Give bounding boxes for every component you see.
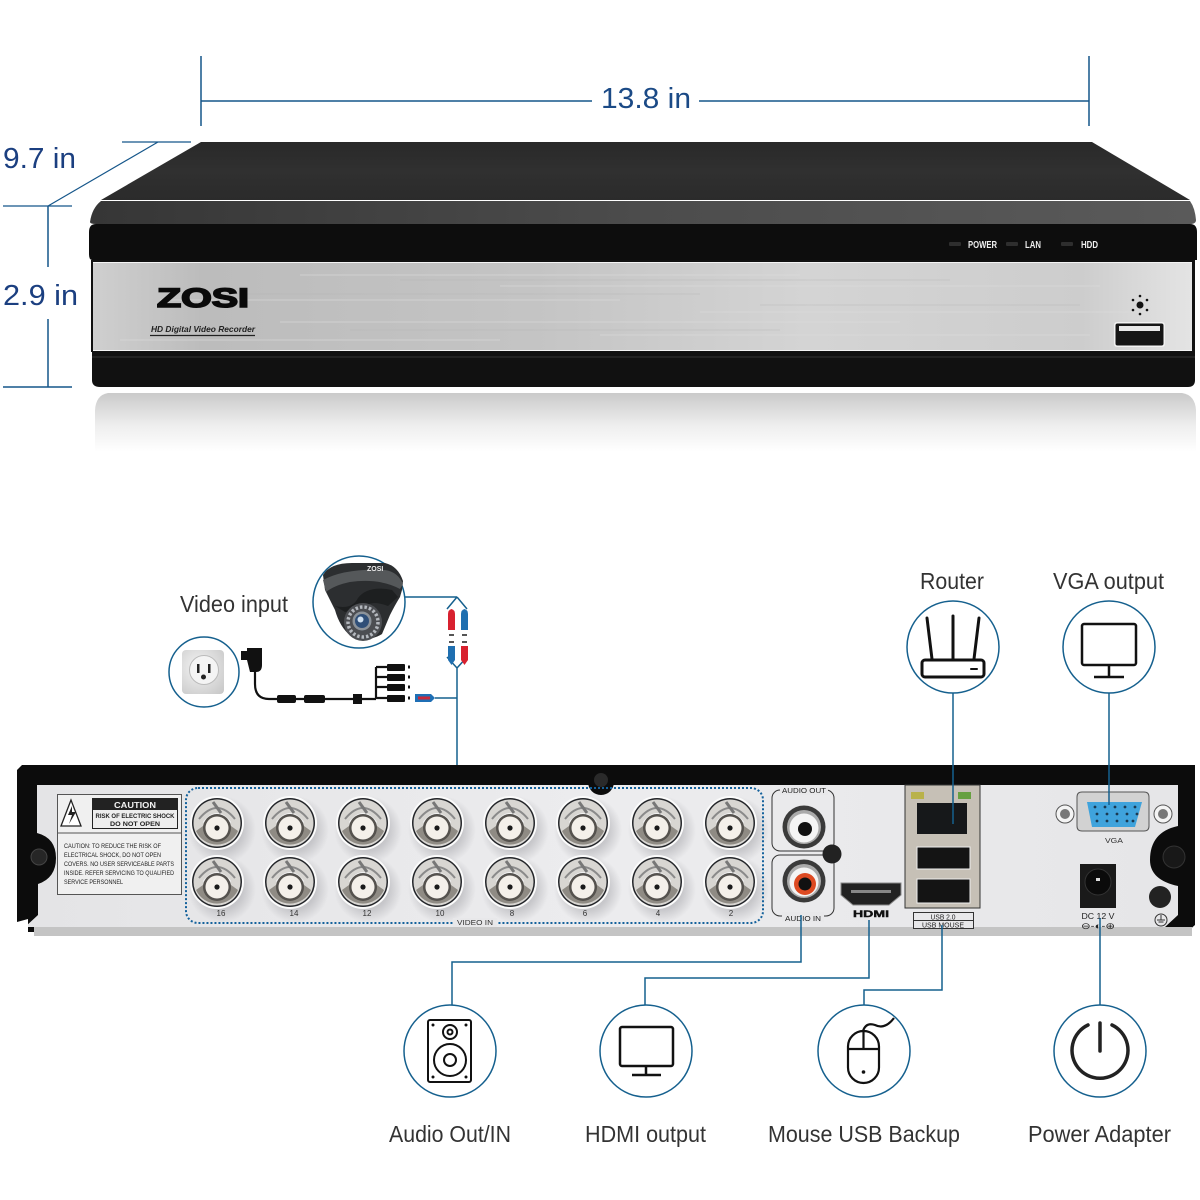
- audio out/in ports: [772, 785, 842, 923]
- callout: VGA output: [1053, 568, 1165, 693]
- front view DVR: [89, 142, 1197, 452]
- rear silver panel: [25, 785, 1178, 927]
- dimension: height 2.9 in: [3, 206, 78, 387]
- callout: Router: Router: [920, 568, 984, 594]
- HDMI port: [841, 883, 901, 920]
- icon: router: [922, 616, 984, 677]
- LED indicators: POWER: [968, 240, 998, 251]
- LED indicators: LAN: [1025, 240, 1041, 251]
- ZOSI logo: [150, 283, 256, 336]
- BNC channel numbers: 10: [436, 909, 445, 918]
- USB 2.0 label: USB MOUSE: [922, 922, 964, 930]
- audio out/in ports: AUDIO IN: [785, 914, 821, 923]
- caution label: INSIDE. REFER SERVICING TO QUALIFIED: [64, 871, 175, 877]
- BNC channel numbers: 16: [217, 909, 226, 918]
- BNC channel numbers: 8: [510, 909, 515, 918]
- BNC channel numbers: 2: [729, 909, 734, 918]
- callout: Audio Out/IN: [389, 1005, 511, 1147]
- icon: speaker: [428, 1020, 471, 1082]
- icon: monitor: [1082, 624, 1136, 677]
- BNC channel numbers: [217, 909, 734, 918]
- dimension: depth 9.7 in: 9.7 in: [3, 143, 76, 175]
- icon: wall outlet: [169, 637, 239, 707]
- bottom black base: [92, 351, 1195, 387]
- DC 12V jack: [1080, 864, 1116, 931]
- callout: Power Adapter: [1028, 1005, 1171, 1147]
- connector lines: [452, 693, 1109, 1005]
- top face: [101, 142, 1190, 200]
- black front band: [89, 224, 1197, 260]
- rear view DVR: [17, 765, 1195, 936]
- BNC channel numbers: 6: [583, 909, 588, 918]
- ZOSI logo: ZOSI: [157, 283, 249, 313]
- audio out/in ports: AUDIO OUT: [782, 786, 826, 795]
- BNC channel numbers: 14: [290, 909, 299, 918]
- BNC channel numbers: 4: [656, 909, 661, 918]
- callout: HDMI output: [585, 1005, 707, 1147]
- rear top notch screw: [588, 769, 614, 795]
- USB 2.0 label: [914, 912, 974, 930]
- caution label: CAUTION: [114, 801, 156, 810]
- ZOSI logo: HD Digital Video Recorder: [151, 324, 256, 334]
- icon: monitor: [620, 1027, 673, 1075]
- caution label: COVERS. NO USER SERVICEABLE PARTS: [64, 862, 174, 868]
- DC 12V jack: DC 12 V: [1082, 911, 1115, 921]
- callout: Audio Out/IN: Audio Out/IN: [389, 1121, 511, 1147]
- caution label: [58, 794, 182, 894]
- brushed silver panel: [91, 260, 1195, 352]
- DC 12V jack: ⊖-◐-⊕: [1081, 921, 1115, 931]
- callout: VGA output: VGA output: [1053, 568, 1165, 594]
- LED indicators: HDD: [1081, 240, 1098, 251]
- callout: Power Adapter: Power Adapter: [1028, 1121, 1171, 1147]
- BNC video inputs: [188, 796, 769, 923]
- dimension: width 13.8 in: [201, 56, 1089, 126]
- caution label: SERVICE PERSONNEL: [64, 880, 124, 886]
- VIDEO IN label: VIDEO IN: [457, 920, 493, 927]
- callout: HDMI output: HDMI output: [585, 1121, 707, 1147]
- icon: dome camera: [313, 556, 405, 648]
- icon: dome camera: ZOSI: [367, 566, 383, 573]
- reflection: [95, 393, 1196, 452]
- chassis: [17, 765, 1195, 932]
- label: Video input: Video input: [180, 591, 289, 617]
- VIDEO IN label: [453, 918, 497, 927]
- video in dotted frame: [186, 788, 763, 923]
- HDMI port: HDMI: [853, 909, 889, 920]
- dimension: width 13.8 in: 13.8 in: [601, 83, 691, 115]
- VGA port: VGA: [1105, 836, 1123, 845]
- LED indicators: [949, 240, 1098, 251]
- icon: power: [1072, 1023, 1128, 1078]
- left screw: [31, 849, 47, 865]
- callout: Router: [907, 568, 999, 693]
- dimension: depth 9.7 in: [3, 142, 191, 206]
- USB port: [1114, 322, 1165, 347]
- ground screw and symbol: [1149, 846, 1185, 926]
- VGA port: [1056, 792, 1172, 845]
- LAN and USB stack: [905, 785, 980, 908]
- video cable connectors: [405, 597, 468, 787]
- callout: Mouse USB Backup: Mouse USB Backup: [768, 1121, 960, 1147]
- textured lid edge: [90, 201, 1196, 224]
- IR sensor icon: [1132, 295, 1148, 315]
- icon: mouse: [848, 1018, 894, 1083]
- caution label: RISK OF ELECTRIC SHOCK: [96, 814, 175, 820]
- dimension: height 2.9 in: 2.9 in: [3, 280, 78, 312]
- BNC channel numbers: 12: [363, 909, 372, 918]
- power adapter and splitter cable: [241, 648, 435, 704]
- caution label: ELECTRICAL SHOCK, DO NOT OPEN: [64, 853, 161, 859]
- caution label: DO NOT OPEN: [110, 822, 160, 828]
- USB 2.0 label: USB 2.0: [930, 914, 956, 922]
- caution label: CAUTION: TO REDUCE THE RISK OF: [64, 844, 161, 850]
- callout: Mouse USB Backup: [768, 1005, 960, 1147]
